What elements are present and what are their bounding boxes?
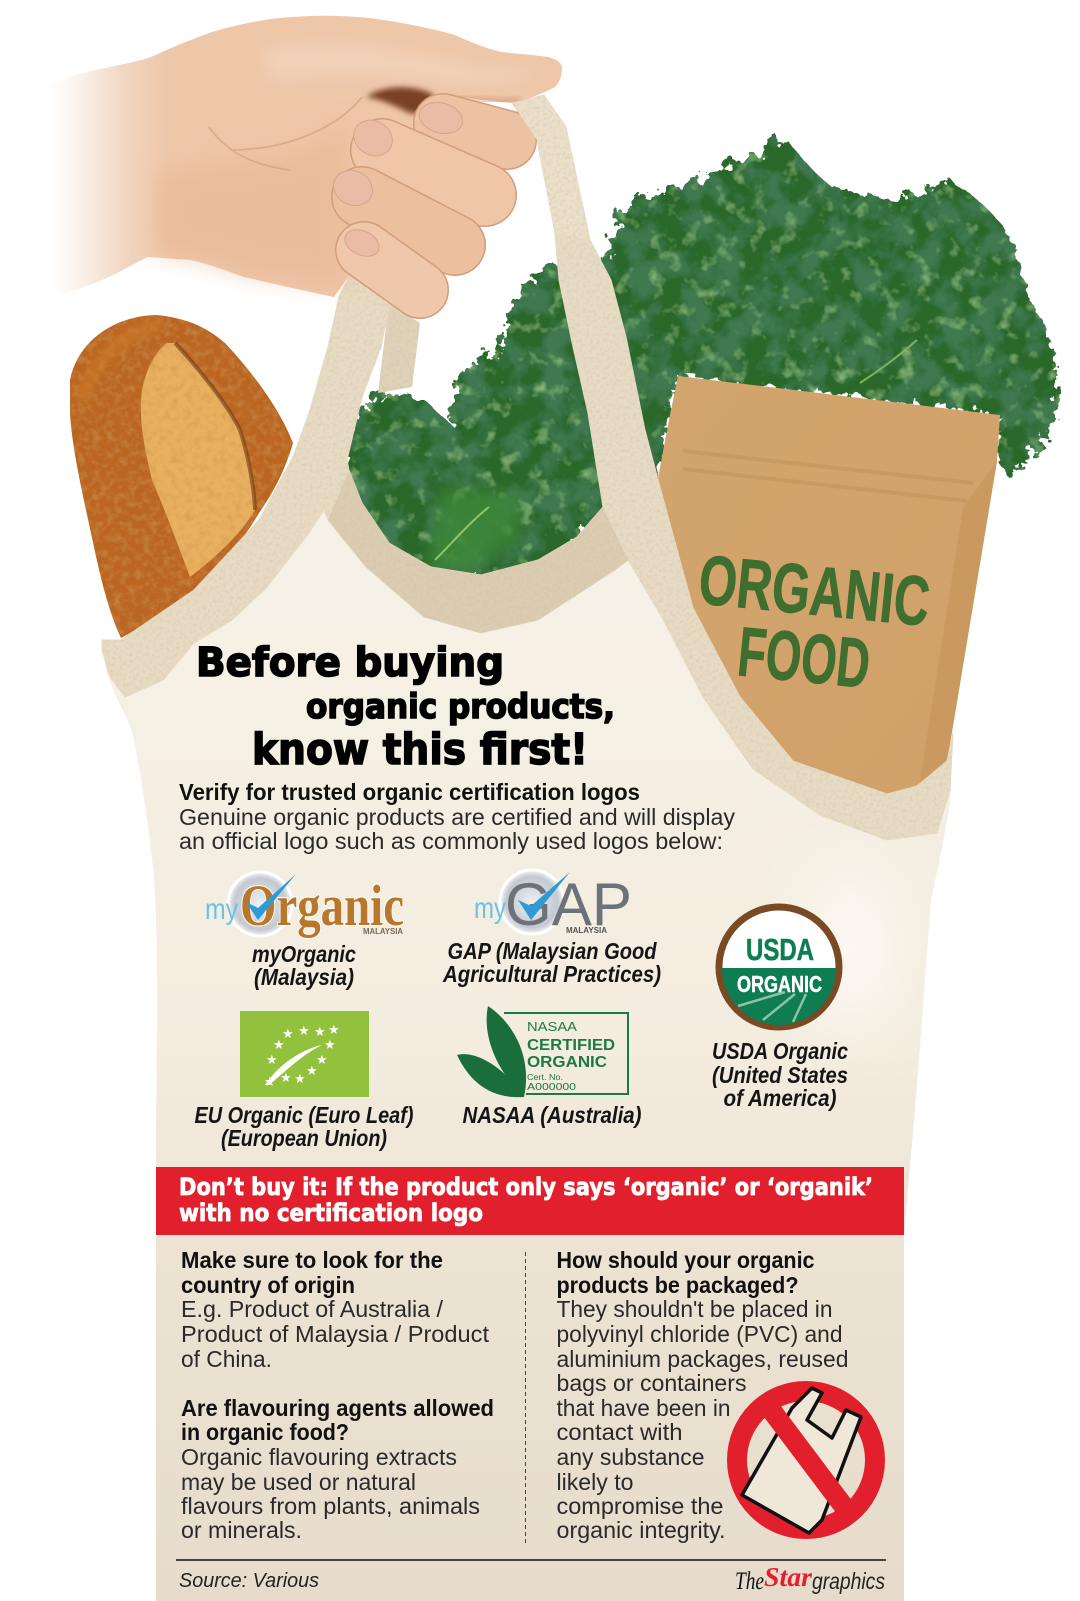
right column text: packaging: organic integrity. <box>556 1517 726 1543</box>
title: organic products, <box>306 687 615 727</box>
country of origin: country of origin <box>181 1272 355 1298</box>
logo: NASAA Certified Organic: CERTIFIED <box>527 1037 615 1054</box>
palm shading <box>155 120 350 285</box>
pouch side fold <box>917 461 997 800</box>
logo: NASAA Certified Organic: Cert. No. <box>527 1072 563 1082</box>
strap over the index finger <box>512 95 590 240</box>
logo: myOrganic: my <box>205 893 238 926</box>
logo: EU Organic leaf: ★ <box>324 1037 336 1052</box>
country of origin <box>181 1247 489 1372</box>
neck rim shading <box>328 470 628 633</box>
intro text: verify logos <box>179 779 735 854</box>
caption: myOrganic: (Malaysia) <box>254 964 354 990</box>
caption: GAP: GAP (Malaysian Good <box>448 938 657 964</box>
intro text: verify logos: Verify for trusted organic certification logos <box>179 779 640 805</box>
hand gripping the straps <box>45 16 562 297</box>
country of origin: of China. <box>181 1346 272 1372</box>
flavouring agents: flavours from plants, animals <box>181 1493 480 1519</box>
brand logo: The Star graphics: graphics <box>812 1568 885 1594</box>
pouch zip seal <box>683 451 973 501</box>
caption: myOrganic: myOrganic <box>252 941 356 967</box>
pouch label: ORGANIC FOOD: ORGANIC <box>696 540 933 641</box>
caption: myOrganic <box>252 941 356 990</box>
right column text: packaging <box>556 1247 848 1543</box>
country of origin: Make sure to look for the <box>181 1247 443 1273</box>
logo: USDA Organic: USDA <box>746 932 814 967</box>
logo: EU Organic leaf: ★ <box>306 1063 318 1078</box>
caption: USDA Organic: USDA Organic <box>712 1038 848 1064</box>
pouch label: ORGANIC FOOD <box>696 540 933 703</box>
logo: NASAA Certified Organic: ORGANIC <box>527 1054 607 1071</box>
title: know this first! <box>252 725 588 775</box>
intro text: verify logos: an official logo such as commonly used logos below: <box>179 828 723 854</box>
bread loaf <box>70 315 293 638</box>
logo: EU Organic leaf: ★ <box>298 1023 310 1038</box>
thumb highlight <box>260 44 545 84</box>
fingers <box>362 123 507 290</box>
flavouring agents <box>181 1395 494 1543</box>
logo: EU Organic leaf: ★ <box>266 1052 278 1067</box>
kale leaves <box>345 138 1056 580</box>
warning banner: with no certification logo <box>179 1199 483 1227</box>
logo: NASAA Certified Organic <box>457 1006 628 1097</box>
intro text: verify logos: Genuine organic products are certified and will display <box>179 804 735 830</box>
caption: USDA Organic: of America) <box>724 1085 836 1111</box>
kraft pouch body <box>657 376 1000 810</box>
flavouring agents: Are flavouring agents allowed <box>181 1395 494 1421</box>
left column text <box>181 1247 494 1543</box>
flavouring agents: Organic flavouring extracts <box>181 1444 457 1470</box>
palm creases <box>209 97 362 170</box>
strap and rim band <box>102 95 953 840</box>
logo: EU Organic leaf: ★ <box>316 1052 328 1067</box>
logo: myGAP: MALAYSIA <box>566 926 607 935</box>
fabric highlight <box>805 870 895 1030</box>
footer rule <box>176 1559 886 1561</box>
caption: USDA Organic: (United States <box>712 1062 848 1088</box>
logo: EU Organic leaf: ★ <box>273 1037 285 1052</box>
caption: EU Organic <box>194 1102 414 1151</box>
caption: USDA Organic <box>712 1038 848 1111</box>
logo: EU Organic leaf: ★ <box>280 1070 292 1085</box>
right column text: packaging: likely to <box>556 1469 634 1495</box>
caption: EU Organic: EU Organic (Euro Leaf) <box>194 1102 414 1128</box>
fingernails <box>328 98 466 261</box>
right column text: packaging: aluminium packages, reused <box>556 1346 848 1372</box>
logo: NASAA Certified Organic: NASAA <box>527 1020 578 1034</box>
back strap <box>378 303 420 393</box>
logo: EU Organic leaf <box>240 1011 369 1097</box>
brand logo: The Star graphics <box>735 1562 885 1595</box>
column divider <box>524 1252 526 1543</box>
icon: no plastic bags <box>737 1388 875 1533</box>
kale midrib leaf, lower lobe <box>427 487 519 575</box>
logo: myGAP: GAP <box>505 871 632 938</box>
right column text: packaging: polyvinyl chloride (PVC) and <box>556 1321 842 1347</box>
logo: USDA Organic <box>719 907 839 1027</box>
caption: GAP <box>442 938 661 987</box>
caption: NASAA: NASAA (Australia) <box>462 1102 642 1128</box>
caption: GAP: Agricultural Practices) <box>442 961 661 987</box>
right column text: packaging: any substance <box>556 1444 704 1470</box>
right column text: packaging: How should your organic <box>556 1247 815 1273</box>
logo: EU Organic leaf: ★ <box>294 1071 306 1086</box>
logo: EU Organic leaf: ★ <box>314 1024 326 1039</box>
title: Before buying <box>196 640 504 686</box>
logo: EU Organic leaf: ★ <box>264 1074 276 1089</box>
title <box>196 640 615 775</box>
right column text: packaging: bags or containers <box>556 1370 746 1396</box>
caption: EU Organic: (European Union) <box>221 1125 387 1151</box>
pouch label: ORGANIC FOOD: FOOD <box>735 612 874 703</box>
flavouring agents: in organic food? <box>181 1419 349 1445</box>
brand logo: The Star graphics: Star <box>764 1562 813 1592</box>
brand logo: The Star graphics: The <box>735 1568 764 1595</box>
flavouring agents: may be used or natural <box>181 1469 416 1495</box>
logo: myOrganic <box>205 872 404 938</box>
logo: USDA Organic: ORGANIC <box>737 971 822 997</box>
right column text: packaging: contact with <box>556 1419 682 1445</box>
right column text: packaging: that have been in <box>556 1395 730 1421</box>
logo: myOrganic: MALAYSIA <box>363 927 403 936</box>
warning banner: Don’t buy it: If the product only says ‘organic’ or ‘organik’ <box>179 1173 873 1201</box>
right column text: packaging: They shouldn't be placed in <box>556 1296 832 1322</box>
hollow of the grip <box>366 87 434 114</box>
logo: EU Organic leaf: ★ <box>282 1026 294 1041</box>
country of origin: E.g. Product of Australia / <box>181 1296 443 1322</box>
shadow under the thumb <box>430 97 520 101</box>
logo: myGAP: my <box>474 892 506 925</box>
logo: EU Organic leaf: ★ <box>328 1022 340 1037</box>
flavouring agents: or minerals. <box>181 1517 302 1543</box>
warning banner <box>156 1167 904 1235</box>
country of origin: Product of Malaysia / Product <box>181 1321 489 1347</box>
canvas tote bag body <box>102 95 953 1601</box>
logo: NASAA Certified Organic: A000000 <box>527 1082 577 1093</box>
right column text: packaging: compromise the <box>556 1493 724 1519</box>
source note: Source: Various <box>179 1570 319 1592</box>
right column text: packaging: products be packaged? <box>556 1272 798 1298</box>
logo: myOrganic: Organic <box>240 873 404 938</box>
